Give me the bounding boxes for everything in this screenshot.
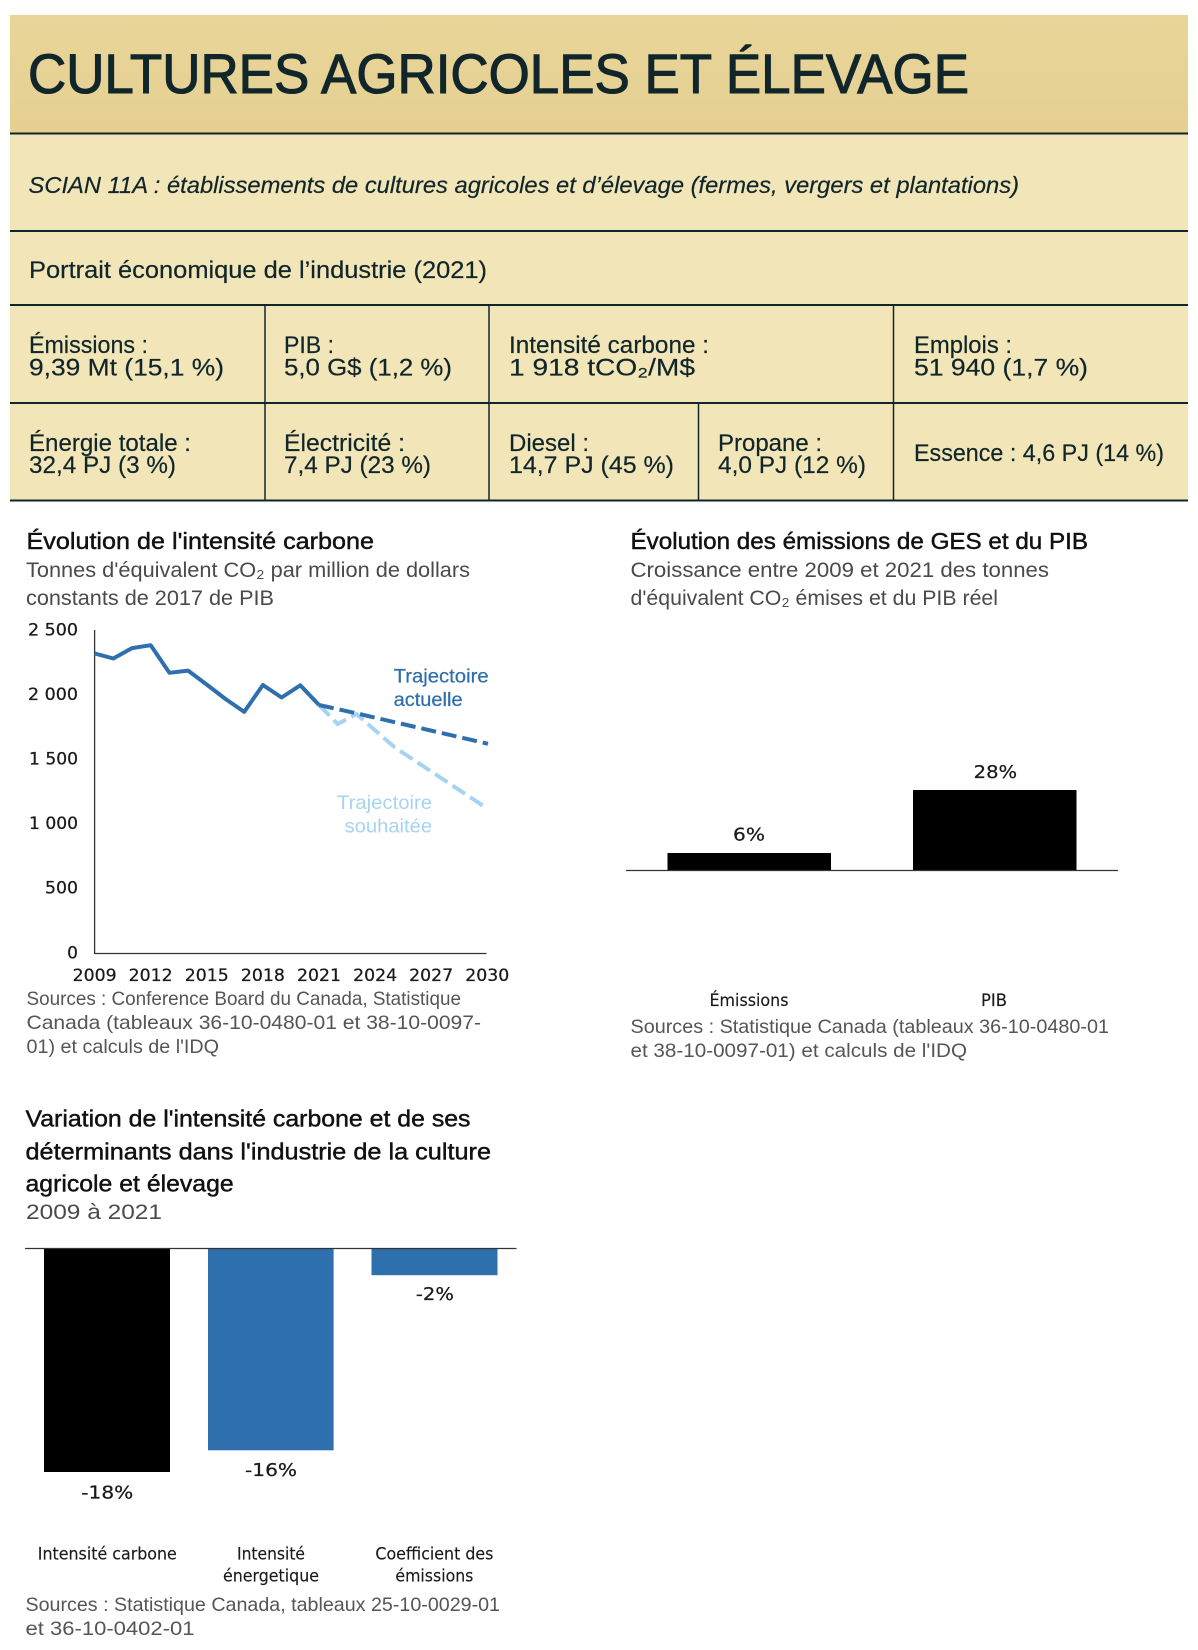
cell: electricity: 7,4 PJ (23 %) (284, 452, 431, 479)
heading: agricole et élevage (26, 1170, 234, 1196)
sources: et 38-10-0097-01) et calculs de l'IDQ (630, 1040, 967, 1062)
category: GDP: PIB (981, 991, 1007, 1010)
x axis labels: 2027 (409, 966, 453, 986)
cell: propane: Propane : (718, 430, 822, 457)
cell: GDP: PIB : (284, 332, 334, 359)
value: -18%: -18% (81, 1482, 133, 1503)
cell: GDP (284, 332, 452, 382)
y axis labels: 1 000 (29, 814, 78, 834)
cell: jobs (914, 332, 1088, 382)
category: emission coefficient: Coefficient des (375, 1545, 493, 1564)
heading: déterminants dans l'industrie de la culture (26, 1138, 491, 1164)
subtitle (630, 558, 1049, 610)
heading: Évolution des émissions de GES et du PIB (630, 528, 1088, 554)
x axis labels: 2024 (353, 966, 397, 986)
y axis labels: 500 (45, 878, 78, 898)
category: energy intensity: énergetique (223, 1566, 319, 1586)
cell: electricity: Électricité : (284, 430, 405, 457)
cell: total energy (29, 430, 191, 479)
sources (26, 988, 481, 1058)
panel: carbon intensity evolution (26, 528, 509, 1058)
value: 6%: 6% (733, 824, 765, 846)
sources: Sources : Statistique Canada (tableaux 36-10-0480-01 (630, 1016, 1109, 1038)
label: desired trajectory (337, 792, 432, 838)
line chart (28, 620, 509, 986)
cell: diesel (509, 430, 674, 479)
value: 28%: 28% (974, 762, 1017, 783)
label: desired trajectory: souhaitée (345, 816, 432, 838)
y axis labels: 2 000 (28, 685, 78, 705)
x axis labels: 2018 (241, 966, 285, 986)
bar chart (25, 1248, 516, 1586)
cell: emissions (29, 332, 224, 382)
x axis labels: 2012 (129, 966, 173, 986)
subtitle: constants de 2017 de PIB (26, 586, 274, 610)
bar: carbon intensity (44, 1248, 170, 1472)
desired trajectory line (319, 705, 487, 808)
y axis labels: 1 500 (29, 750, 78, 770)
bar: energy intensity (208, 1248, 334, 1450)
panel: GHG emissions and GDP evolution (626, 528, 1118, 1062)
cell: total energy: 32,4 PJ (3 %) (29, 452, 176, 479)
x axis labels: 2021 (297, 966, 341, 986)
title: CULTURES AGRICOLES ET ÉLEVAGE (28, 42, 969, 105)
heading (26, 1106, 491, 1196)
value: -2%: -2% (416, 1284, 454, 1305)
label: current trajectory: actuelle (394, 689, 463, 711)
bar: emissions (668, 853, 831, 870)
category: emission coefficient (375, 1545, 493, 1586)
value: -16%: -16% (245, 1460, 297, 1481)
category: emissions: Émissions (710, 991, 788, 1010)
cell: emissions: 9,39 Mt (15,1 %) (29, 354, 224, 382)
category: carbon intensity: Intensité carbone (38, 1545, 177, 1564)
title band (10, 15, 1188, 133)
heading: Variation de l'intensité carbone et de ses (26, 1106, 471, 1132)
y axis labels (28, 620, 78, 964)
category: energy intensity: Intensité (237, 1545, 305, 1564)
subtitle: Croissance entre 2009 et 2021 des tonnes (630, 558, 1049, 582)
bar: GDP (913, 790, 1076, 870)
sources: 01) et calculs de l'IDQ (26, 1036, 219, 1058)
subtitle (26, 558, 470, 610)
heading: Évolution de l'intensité carbone (26, 528, 374, 554)
x axis labels: 2015 (185, 966, 229, 986)
cell: propane (718, 430, 866, 479)
sources: Sources : Conference Board du Canada, Statistique (26, 988, 461, 1010)
sources (26, 1594, 500, 1640)
sources: et 36-10-0402-01 (26, 1618, 194, 1640)
label: current trajectory (394, 666, 489, 711)
cell: carbon intensity: Intensité carbone : (509, 332, 709, 359)
cell: electricity (284, 430, 431, 479)
category: energy intensity (223, 1545, 319, 1586)
cell: gasoline: Essence : 4,6 PJ (14 %) (914, 440, 1164, 467)
y axis labels: 0 (67, 944, 78, 964)
cell: carbon intensity: 1 918 tCO₂/M$ (509, 354, 695, 382)
table heading: Portrait économique de l’industrie (2021) (29, 257, 487, 284)
panel: economic profile table (10, 133, 1188, 501)
panel: carbon intensity drivers (25, 1106, 516, 1640)
subtitle: 2009 à 2021 (26, 1200, 162, 1224)
label: current trajectory: Trajectoire (394, 666, 489, 688)
category: emission coefficient: émissions (395, 1566, 473, 1586)
subtitle: d'équivalent CO₂ émises et du PIB réel (630, 586, 998, 610)
NAICS description: SCIAN 11A : établissements de cultures agricoles et d’élevage (fermes, vergers et plantations) (28, 172, 1019, 198)
cell: emissions: Émissions : (29, 332, 148, 359)
cell: diesel: 14,7 PJ (45 %) (509, 452, 674, 479)
bar: emission coefficient (372, 1248, 498, 1275)
bar chart (626, 762, 1118, 1010)
y axis labels: 2 500 (28, 620, 78, 640)
label: desired trajectory: Trajectoire (337, 792, 432, 814)
sources: Canada (tableaux 36-10-0480-01 et 38-10-0097- (26, 1012, 481, 1034)
cell: diesel: Diesel : (509, 430, 589, 457)
cell: propane: 4,0 PJ (12 %) (718, 452, 866, 479)
cell: jobs: 51 940 (1,7 %) (914, 354, 1088, 382)
x axis labels (73, 966, 509, 986)
cell: total energy: Énergie totale : (29, 430, 191, 457)
cell: carbon intensity (509, 332, 709, 382)
cell: GDP: 5,0 G$ (1,2 %) (284, 354, 452, 382)
x axis labels: 2030 (465, 966, 509, 986)
current trajectory line (319, 705, 488, 744)
sources: Sources : Statistique Canada, tableaux 25-10-0029-01 (26, 1594, 500, 1616)
sources (630, 1016, 1109, 1062)
x axis labels: 2009 (73, 966, 117, 986)
historical line (95, 645, 319, 712)
subtitle: Tonnes d'équivalent CO₂ par million de dollars (26, 558, 470, 582)
cell: jobs: Emplois : (914, 332, 1012, 359)
